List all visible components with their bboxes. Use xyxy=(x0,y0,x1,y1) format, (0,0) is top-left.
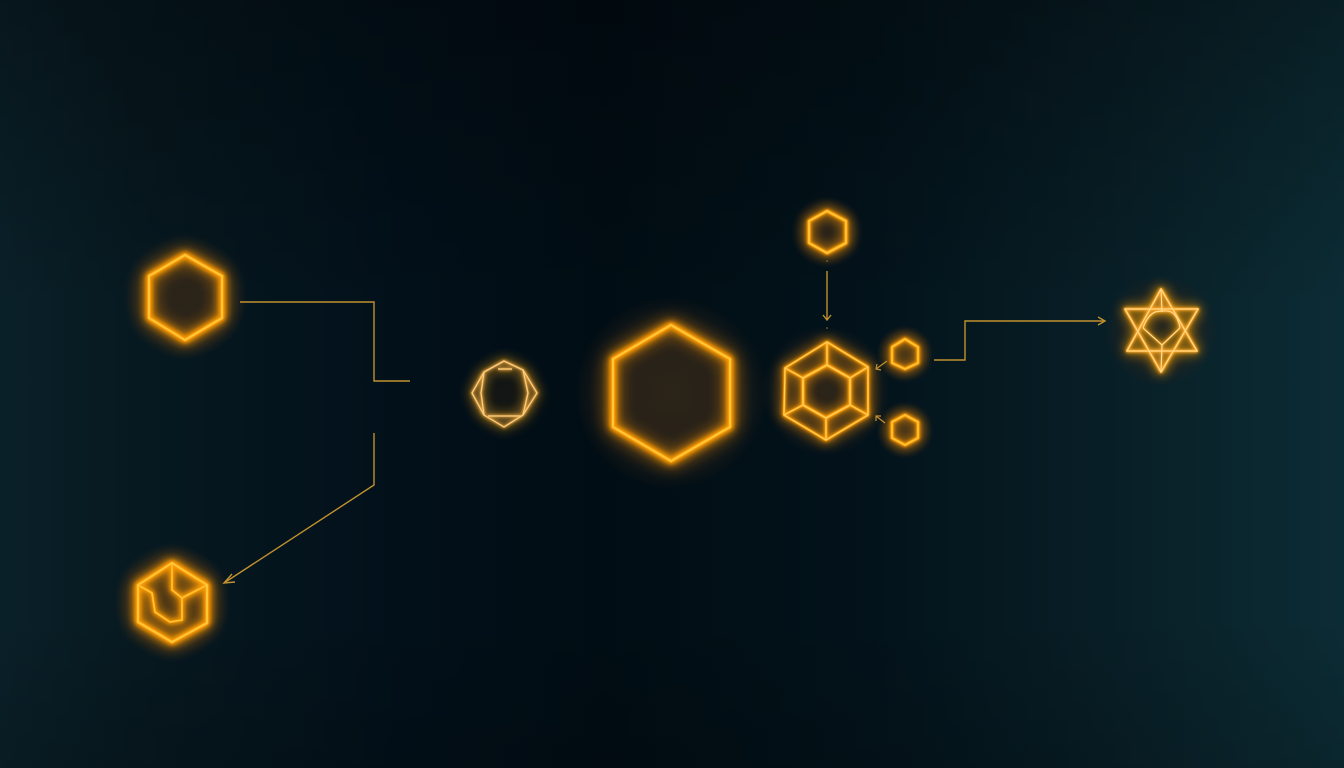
icon: large central hexagon xyxy=(575,297,767,489)
icon: right small hexagon lower xyxy=(877,402,933,458)
connector: elbow line from input hexagon xyxy=(240,302,410,381)
icon: cut-out cube hexagon xyxy=(114,544,230,660)
arrow: cube to star xyxy=(934,317,1105,360)
icon: input hexagon xyxy=(123,235,247,359)
icon: output star xyxy=(1105,275,1217,387)
arrow: upper small hexagon into cube xyxy=(876,361,887,370)
icon: top small hexagon xyxy=(791,196,863,268)
arrow: lower small hexagon into cube xyxy=(876,416,885,423)
icon: octagram outline xyxy=(459,348,551,440)
arrow: top hexagon into cube xyxy=(823,260,831,329)
arrow: down to cut-out cube hexagon xyxy=(224,433,374,583)
icon: right small hexagon upper xyxy=(877,326,933,382)
icon: nested hexagon cube xyxy=(762,327,890,455)
